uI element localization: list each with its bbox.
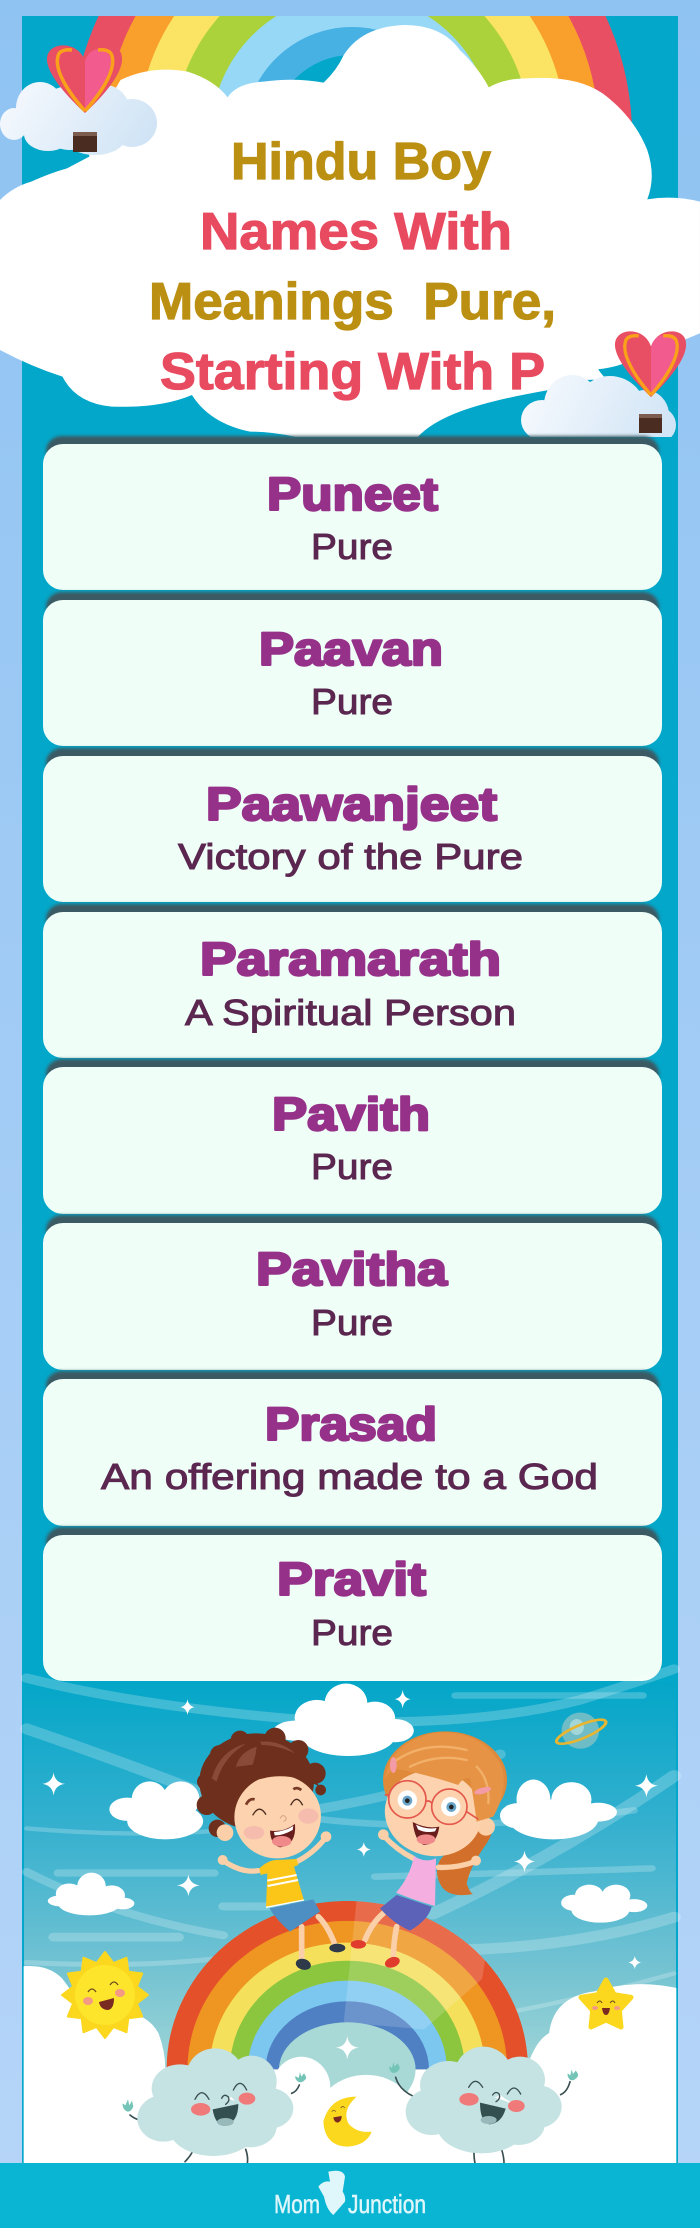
title: Meanings Pure, <box>149 273 556 331</box>
card: Pravit: Pure <box>311 1612 393 1653</box>
logo mark <box>318 2171 345 2215</box>
cloud top centre <box>274 1684 414 1756</box>
right cloud character <box>389 2047 578 2163</box>
MomJunction logo <box>274 2171 426 2219</box>
title: Names With <box>200 203 512 261</box>
footer band <box>0 2163 700 2228</box>
moon <box>323 2097 372 2147</box>
cloud characters and moon <box>123 2047 578 2163</box>
card: Pavitha: Pure <box>311 1302 393 1343</box>
header illustration <box>0 0 700 448</box>
title: Hindu Boy <box>231 133 491 191</box>
cloud small right <box>561 1885 647 1923</box>
card: Paramarath: A Spiritual Person <box>185 992 516 1033</box>
right small cloud <box>521 375 676 437</box>
card: Pavitha <box>43 1215 662 1370</box>
planet <box>553 1713 609 1749</box>
card: Puneet <box>43 436 662 590</box>
card: Prasad: An offering made to a God <box>101 1456 598 1497</box>
main rainbow <box>166 1901 528 2092</box>
left cloud character <box>123 2048 306 2163</box>
bottom scene <box>24 1669 676 2228</box>
card: Puneet: Pure <box>311 526 393 567</box>
sky <box>24 1681 676 2163</box>
scene artwork <box>24 1669 676 2228</box>
children <box>197 1728 507 1971</box>
card: Paramarath: Paramarath <box>200 933 501 985</box>
boy <box>197 1728 345 1971</box>
card: Pravit <box>43 1527 662 1681</box>
cloud left <box>109 1781 203 1839</box>
card: Paavan <box>43 592 662 746</box>
card: Paawanjeet: Paawanjeet <box>206 778 497 830</box>
card: Prasad <box>43 1371 662 1526</box>
sky streaks <box>27 1669 674 2011</box>
white hills inside arch <box>272 2057 446 2167</box>
title <box>149 133 556 401</box>
card: Paramarath <box>43 904 662 1058</box>
left small cloud <box>0 82 157 155</box>
card: Pavith <box>43 1059 662 1214</box>
logo wordmark <box>274 2189 426 2219</box>
card: Paavan: Pure <box>311 681 393 722</box>
big white cloud <box>0 25 700 440</box>
card: Pavitha: Pavitha <box>256 1243 447 1295</box>
sun <box>62 1952 148 2038</box>
card: Prasad: Prasad <box>265 1398 437 1450</box>
white cloud mass <box>24 1966 676 2165</box>
star character <box>581 1980 631 2027</box>
cloud small left <box>48 1873 134 1915</box>
left balloon <box>47 45 122 152</box>
card: Paawanjeet: Victory of the Pure <box>178 836 523 877</box>
cloud right <box>500 1780 617 1839</box>
logo wordmark: Junction <box>348 2189 426 2219</box>
sparkles <box>42 1690 658 2059</box>
card: Paawanjeet <box>43 748 662 902</box>
card: Pavith: Pure <box>311 1146 393 1187</box>
header rainbow <box>83 16 632 122</box>
right balloon basket <box>639 414 662 433</box>
card: Pravit: Pravit <box>277 1553 426 1605</box>
right balloon <box>615 331 686 397</box>
logo wordmark: Mom <box>274 2189 320 2219</box>
card: Pavith: Pavith <box>272 1088 430 1140</box>
girl <box>351 1731 507 1970</box>
title: Starting With P <box>160 343 545 401</box>
card: Puneet: Puneet <box>267 468 438 520</box>
card: Paavan: Paavan <box>259 623 443 675</box>
